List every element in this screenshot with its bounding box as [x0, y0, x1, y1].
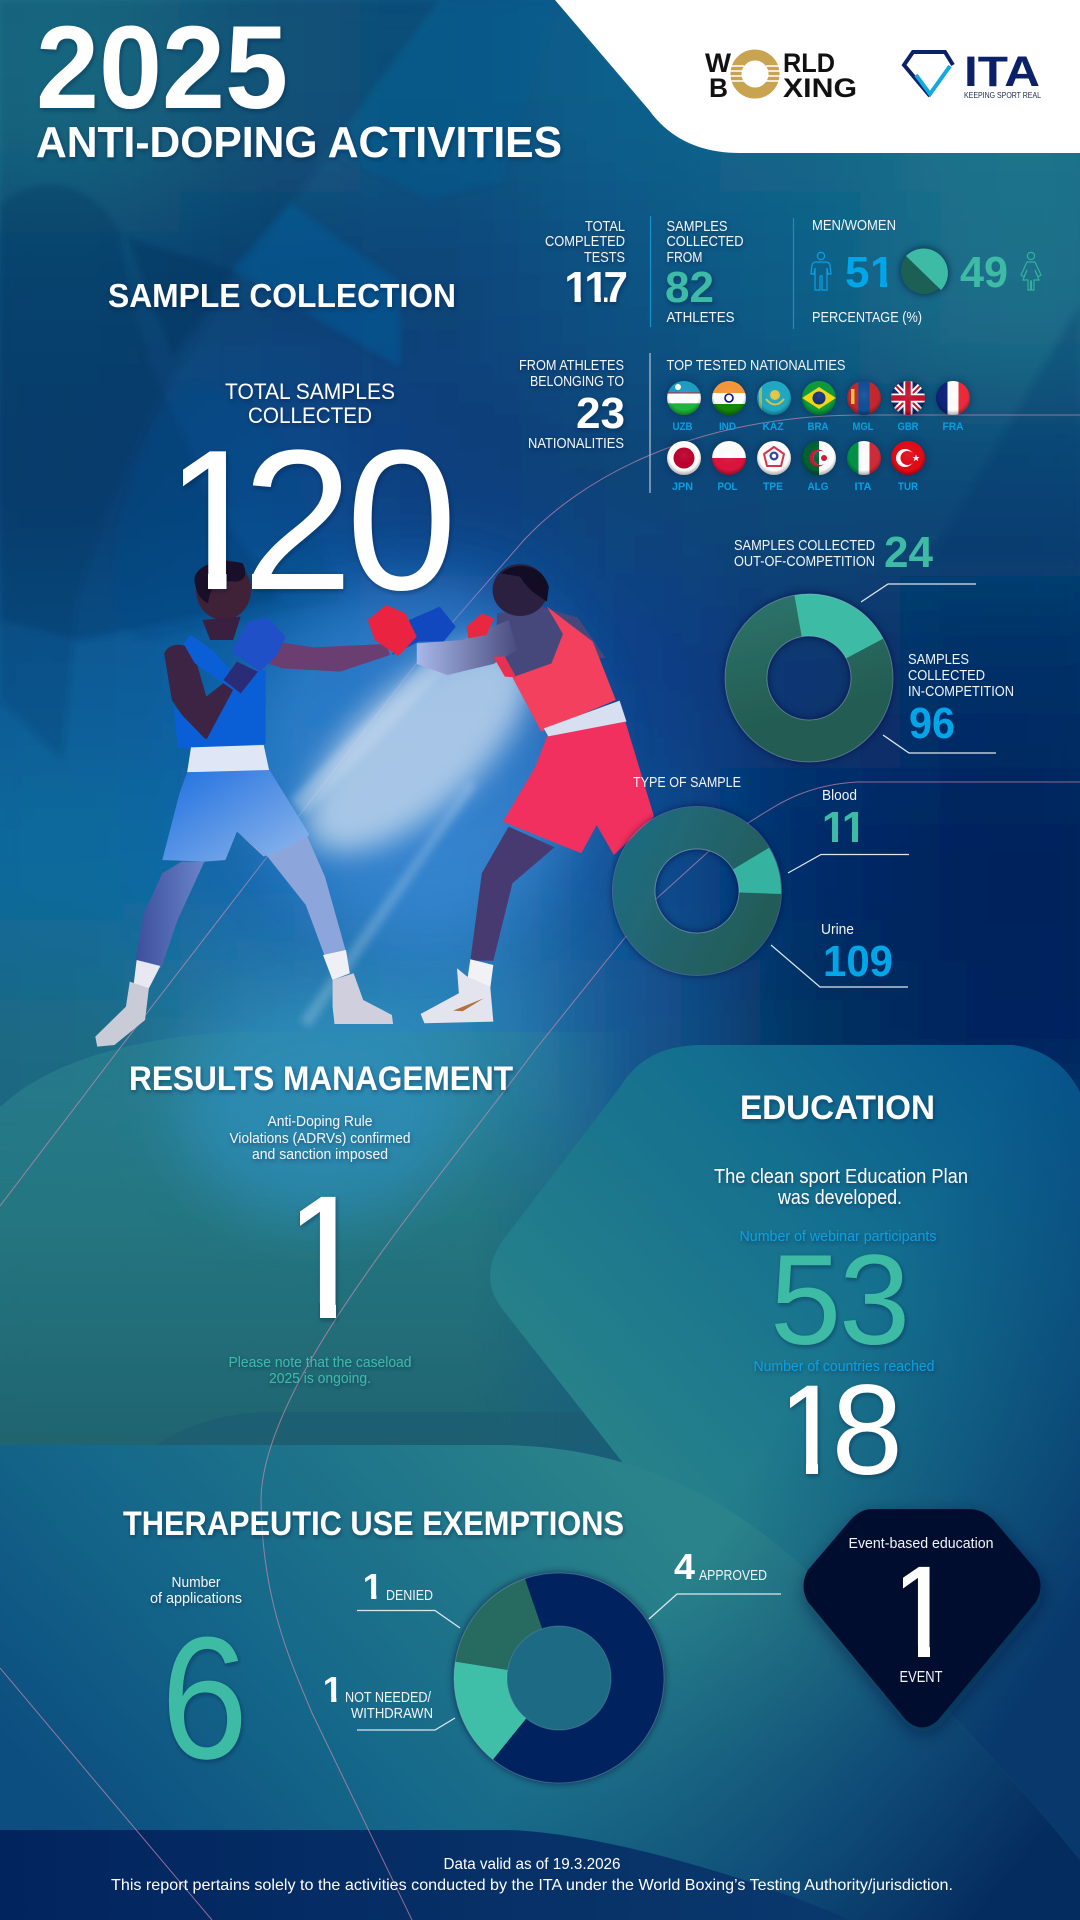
- panel: results management background: [0, 1032, 572, 1445]
- icon: woman: [1021, 252, 1041, 290]
- flag: Kazakhstan: [756, 380, 792, 416]
- top tested nationalities: TOP TESTED NATIONALITIES: [666, 357, 846, 374]
- callout: denied: [357, 1566, 460, 1628]
- callout: approved: APPROVED: [699, 1567, 767, 1584]
- samples collected from athletes stat: COLLECTED: [666, 233, 744, 250]
- logo: World Boxing: B: [709, 73, 728, 103]
- footer note: Data valid as of 19.3.2026: [444, 1856, 621, 1873]
- caseload note: [228, 1354, 412, 1387]
- total samples collected: COLLECTED: [248, 403, 372, 428]
- section: results management: [129, 1060, 513, 1387]
- flag: Italy: [846, 440, 882, 476]
- nationalities stat: [519, 357, 625, 452]
- description: [230, 1113, 410, 1163]
- flag labels: POL: [718, 481, 738, 493]
- callout: not needed or withdrawn: 1: [323, 1669, 343, 1710]
- icon: man: [811, 252, 831, 290]
- total completed tests stat: TESTS: [584, 249, 625, 266]
- plan text: The clean sport Education Plan: [714, 1166, 968, 1188]
- boxer in red: [368, 564, 654, 1023]
- webinar participants: Number of webinar participants: [740, 1229, 936, 1245]
- samples collected from athletes stat: SAMPLES: [666, 218, 728, 235]
- flag: Great Britain: [890, 380, 926, 416]
- logo: World Boxing: [705, 48, 857, 103]
- logo: World Boxing: XING: [783, 73, 857, 103]
- flag: Japan: [666, 440, 702, 476]
- number of applications: of applications: [150, 1590, 242, 1607]
- total completed tests stat: [546, 221, 628, 305]
- caseload note: Please note that the caseload: [228, 1354, 412, 1371]
- flag labels: JPN: [672, 481, 693, 493]
- total completed tests stat: COMPLETED: [545, 233, 625, 250]
- callout: approved: 4: [674, 1546, 695, 1587]
- callout: denied: 1: [363, 1566, 383, 1607]
- top tested nationalities: [666, 357, 971, 493]
- big number 120: 120: [158, 409, 457, 632]
- flag labels: UZB: [672, 421, 693, 433]
- title year: 2025: [36, 2, 288, 134]
- badge: event-based education: Event-based education: [848, 1535, 994, 1552]
- panel: education background: [490, 1045, 1080, 1880]
- big number 1: 1: [276, 1160, 374, 1356]
- logo: World Boxing: RLD: [783, 48, 835, 78]
- glow over results panel: [180, 1000, 460, 1220]
- footer note: This report pertains solely to the activities conducted by the ITA under the World Boxing’s Testing Authority/jurisdiction.: [111, 1877, 953, 1894]
- flag labels: MGL: [852, 421, 874, 433]
- flag: Algeria: [801, 440, 837, 476]
- total completed tests stat: TOTAL: [585, 218, 625, 235]
- description: and sanction imposed: [252, 1146, 388, 1163]
- flag labels: GBR: [898, 421, 919, 433]
- donut: type of sample: TYPE OF SAMPLE: [633, 774, 741, 791]
- heading: EDUCATION: [740, 1089, 935, 1127]
- flag labels: TPE: [763, 481, 783, 493]
- webinar participants: 53: [770, 1229, 910, 1372]
- light burst behind boxers: [240, 585, 590, 1028]
- flag: Brazil: [801, 380, 837, 416]
- nationalities stat: BELONGING TO: [530, 373, 624, 390]
- callout: not needed or withdrawn: NOT NEEDED/: [345, 1689, 432, 1706]
- number: women: 49: [960, 248, 1008, 297]
- pie: men and women: [901, 248, 948, 294]
- total samples collected: [158, 379, 457, 632]
- flag labels: TUR: [898, 481, 918, 493]
- title block: [36, 2, 562, 167]
- callout: blood: 11: [822, 803, 866, 852]
- callout: approved: [649, 1546, 781, 1619]
- illustration: two boxers: [95, 560, 654, 1047]
- badge: event-based education: 1: [885, 1538, 958, 1685]
- countries reached: Number of countries reached: [754, 1359, 934, 1375]
- callout: in-competition: [883, 651, 1014, 753]
- flag labels: ITA: [854, 481, 872, 493]
- callout: in-competition: COLLECTED: [908, 667, 985, 684]
- thin pink decorative lines: [0, 415, 1080, 1920]
- callout: urine: 109: [823, 937, 893, 986]
- footer note: [111, 1856, 953, 1894]
- total completed tests stat: 117: [564, 263, 628, 312]
- header white corner: [555, 0, 1080, 153]
- flag: Chinese Taipei: [756, 440, 792, 476]
- flag: Turkey: [890, 440, 926, 476]
- flag labels: [672, 421, 964, 493]
- section heading: therapeutic use exemptions: THERAPEUTIC USE EXEMPTIONS: [123, 1505, 624, 1543]
- men/women split: MEN/WOMEN: [812, 217, 896, 234]
- heading: RESULTS MANAGEMENT: [129, 1060, 513, 1098]
- callout: blood: Blood: [822, 787, 857, 804]
- badge: event-based education: EVENT: [900, 1669, 943, 1686]
- panel: therapeutic darker arc: [70, 1412, 780, 1560]
- nationalities stat: NATIONALITIES: [528, 435, 624, 452]
- section: education: [714, 1089, 968, 1502]
- callout: out-of-competition: SAMPLES COLLECTED: [734, 537, 875, 554]
- callout: out-of-competition: 24: [884, 528, 934, 577]
- men/women split: PERCENTAGE (%): [812, 309, 922, 326]
- callout: in-competition: SAMPLES: [908, 651, 969, 668]
- caseload note: 2025 is ongoing.: [269, 1370, 371, 1387]
- flag labels: KAZ: [762, 421, 784, 433]
- samples collected from athletes stat: ATHLETES: [666, 309, 734, 326]
- logo: ITA: ITA: [964, 48, 1040, 96]
- footer band: [0, 1830, 850, 1920]
- samples collected from athletes stat: 82: [665, 263, 714, 312]
- flag: Poland: [711, 440, 747, 476]
- flag: France: [935, 380, 971, 416]
- callout: denied: DENIED: [386, 1587, 433, 1604]
- callout: urine: [771, 921, 908, 987]
- callout: out-of-competition: OUT-OF-COMPETITION: [734, 553, 875, 570]
- title subtitle: ANTI-DOPING ACTIVITIES: [36, 118, 562, 167]
- callout: not needed or withdrawn: [323, 1669, 455, 1730]
- plan text: [714, 1166, 968, 1209]
- panel: therapeutic use exemptions background: [0, 1445, 1080, 1920]
- logo: World Boxing: W: [705, 48, 732, 78]
- flag: Mongolia: [846, 380, 882, 416]
- callout: out-of-competition: [734, 528, 976, 602]
- flag labels: ALG: [808, 481, 828, 493]
- number of applications: 6: [161, 1600, 248, 1795]
- callout: in-competition: 96: [909, 699, 955, 748]
- donut: type of sample: [611, 774, 783, 977]
- flag labels: BRA: [808, 421, 829, 433]
- nationalities stat: FROM ATHLETES: [519, 357, 624, 374]
- nationalities stat: 23: [576, 389, 625, 438]
- callout: urine: Urine: [821, 921, 854, 938]
- badge: event-based education: [804, 1509, 1040, 1728]
- number: men: 51: [845, 248, 894, 297]
- flag: India: [711, 380, 747, 416]
- donut: samples out of and in competition: [725, 594, 893, 762]
- description: Anti-Doping Rule: [268, 1113, 372, 1130]
- logo: ITA: KEEPING SPORT REAL: [964, 91, 1041, 100]
- callout: in-competition: IN-COMPETITION: [908, 683, 1014, 700]
- total samples collected: TOTAL SAMPLES: [225, 379, 395, 404]
- number of applications: Number: [172, 1574, 220, 1591]
- description: Violations (ADRVs) confirmed: [230, 1130, 410, 1147]
- samples collected from athletes stat: FROM: [666, 249, 702, 266]
- countries reached: 18: [774, 1359, 903, 1502]
- background: faded glove and facets: [0, 0, 1080, 760]
- plan text: was developed.: [777, 1187, 902, 1209]
- callout: blood: [788, 787, 909, 873]
- flag: Uzbekistan: [666, 380, 702, 416]
- donut: TUE outcomes: [449, 1568, 669, 1788]
- section heading: sample collection: SAMPLE COLLECTION: [108, 277, 456, 314]
- callout: not needed or withdrawn: WITHDRAWN: [351, 1705, 433, 1722]
- flag labels: FRA: [942, 421, 964, 433]
- samples collected from athletes stat: [665, 218, 744, 326]
- logo: ITA: [904, 48, 1041, 100]
- men/women split: [811, 217, 1041, 326]
- boxer in blue: [95, 560, 456, 1047]
- flag labels: IND: [719, 421, 736, 433]
